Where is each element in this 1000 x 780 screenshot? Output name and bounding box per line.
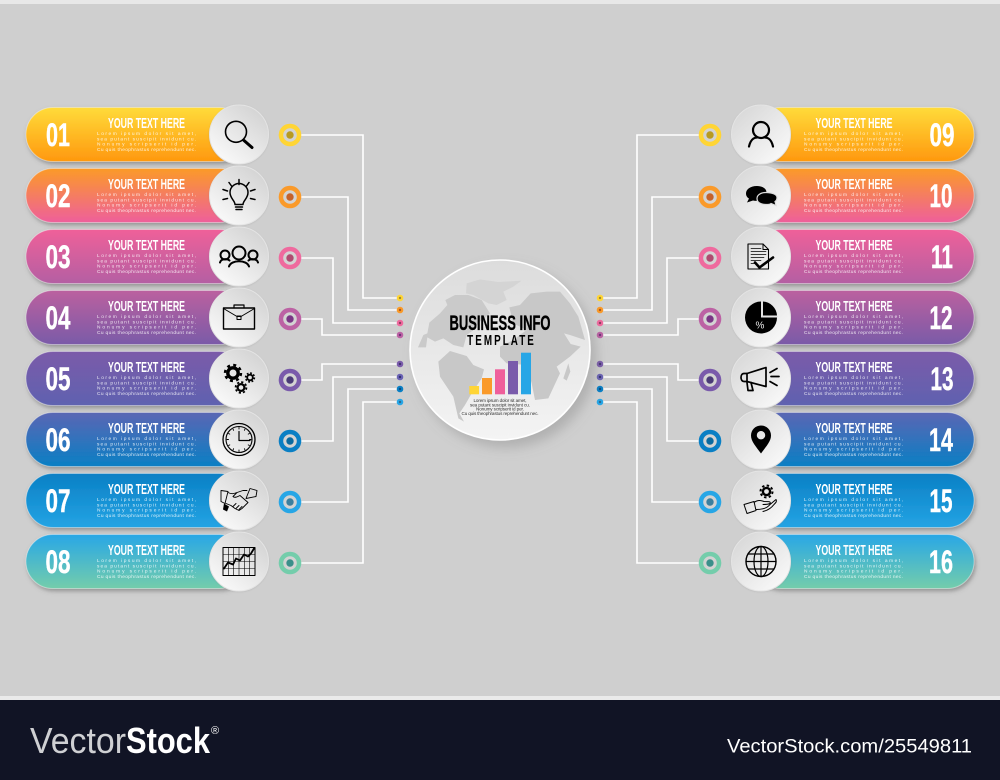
heading: YOUR TEXT HERE	[816, 481, 892, 498]
body text: Nonumy scripserit id per.	[97, 386, 196, 392]
bar	[754, 534, 974, 588]
number: 03	[46, 239, 70, 275]
icon: pie chart	[745, 300, 778, 334]
body text: Nonumy scripserit id per.	[97, 508, 196, 514]
body text	[804, 253, 903, 275]
panel: item 06	[26, 410, 301, 469]
body text: Lorem ipsum dolor sit amet,	[97, 192, 196, 198]
body text: Nonumy scripserit id per.	[804, 447, 903, 453]
ring	[699, 124, 721, 146]
heading: YOUR TEXT HERE	[108, 420, 185, 437]
body text: sea putant suscipit invidunt cu.	[804, 258, 903, 264]
number: 01	[46, 117, 70, 153]
body text: Cu quis theophrastus reprehendunt nec.	[97, 269, 196, 275]
heading: YOUR TEXT HERE	[108, 176, 185, 193]
body text	[804, 436, 903, 458]
icon circle	[210, 471, 268, 530]
icon circle	[732, 532, 790, 591]
heading: YOUR TEXT HERE	[108, 298, 185, 315]
body text: Cu quis theophrastus reprehendunt nec.	[804, 574, 903, 580]
number: 11	[931, 239, 953, 275]
panel: item 05	[26, 349, 301, 408]
ring	[699, 247, 721, 269]
panel: item 08	[26, 532, 301, 591]
panel: item 01	[26, 105, 301, 164]
number: 10	[930, 178, 952, 214]
body text: Lorem ipsum dolor sit amet,	[97, 314, 196, 320]
panel: item 14	[699, 410, 974, 469]
body text: Nonumy scripserit id per.	[804, 386, 903, 392]
icon: chart grid	[223, 548, 255, 576]
body text: Lorem ipsum dolor sit amet,	[804, 558, 903, 564]
ring	[279, 186, 301, 208]
number: 15	[930, 483, 952, 519]
body text	[97, 192, 196, 214]
body text: Nonumy scripserit id per.	[97, 203, 196, 209]
bar	[754, 352, 974, 406]
body text: Nonumy scripserit id per.	[804, 508, 903, 514]
bar	[26, 474, 246, 528]
brand logo	[30, 720, 219, 761]
body text: Cu quis theophrastus reprehendunt nec.	[804, 391, 903, 397]
body text	[804, 192, 903, 214]
heading: YOUR TEXT HERE	[108, 115, 185, 132]
panel: item 10	[699, 166, 974, 225]
icon: team	[220, 246, 258, 266]
ring	[699, 186, 721, 208]
ring	[279, 124, 301, 146]
body text	[97, 558, 196, 580]
small connector dots	[397, 295, 603, 405]
body text: Lorem ipsum dolor sit amet,	[97, 497, 196, 503]
heading: YOUR TEXT HERE	[816, 115, 892, 132]
body text	[804, 497, 903, 519]
body text: Lorem ipsum dolor sit amet,	[97, 558, 196, 564]
bar	[754, 474, 974, 528]
icon circle	[732, 288, 790, 347]
icon: map pin	[751, 426, 771, 454]
body text: sea putant suscipit invidunt cu.	[97, 136, 196, 142]
icon: document with check	[748, 244, 773, 269]
icon: clock	[223, 424, 255, 456]
heading: YOUR TEXT HERE	[816, 237, 892, 254]
heading: YOUR TEXT HERE	[816, 298, 892, 315]
footer edge	[0, 696, 1000, 700]
body text: sea putant suscipit invidunt cu.	[804, 136, 903, 142]
body text: sea putant suscipit invidunt cu.	[804, 380, 903, 386]
globe caption: sea putant suscipit invidunt cu.	[470, 402, 530, 407]
number: 08	[46, 544, 70, 580]
body text: sea putant suscipit invidunt cu.	[97, 319, 196, 325]
number: 14	[929, 422, 953, 458]
icon: person	[749, 122, 773, 146]
body text: Nonumy scripserit id per.	[804, 325, 903, 331]
icon circle	[732, 166, 790, 225]
body text: sea putant suscipit invidunt cu.	[804, 319, 903, 325]
body text: sea putant suscipit invidunt cu.	[804, 502, 903, 508]
icon: magnifier	[226, 121, 252, 148]
icon circle	[210, 349, 268, 408]
number: 07	[46, 483, 70, 519]
globe caption	[462, 398, 538, 416]
icon: megaphone	[741, 368, 779, 390]
body text	[97, 497, 196, 519]
footer band	[0, 696, 1000, 780]
body text: sea putant suscipit invidunt cu.	[804, 563, 903, 569]
brand logo: Stock	[126, 720, 211, 761]
subtitle: TEMPLATE	[467, 332, 534, 349]
body text: Nonumy scripserit id per.	[804, 203, 903, 209]
heading: YOUR TEXT HERE	[816, 420, 892, 437]
icon: light bulb	[223, 180, 255, 210]
title: BUSINESS INFO	[450, 312, 550, 335]
icon: pie chart: %	[756, 320, 765, 332]
body text: sea putant suscipit invidunt cu.	[804, 441, 903, 447]
ring	[279, 308, 301, 330]
footer background	[0, 700, 1000, 780]
icon: globe	[746, 546, 776, 576]
icon circle	[732, 105, 790, 164]
ring	[699, 369, 721, 391]
body text	[97, 436, 196, 458]
panel: item 09	[699, 105, 974, 164]
icon circle	[210, 227, 268, 286]
icon: gears	[225, 365, 254, 393]
number: 16	[929, 544, 953, 580]
body text: Cu quis theophrastus reprehendunt nec.	[97, 452, 196, 458]
brand logo: Vector	[30, 720, 126, 761]
body text: Cu quis theophrastus reprehendunt nec.	[97, 147, 196, 153]
body text: Nonumy scripserit id per.	[804, 264, 903, 270]
body text	[97, 253, 196, 275]
heading: YOUR TEXT HERE	[108, 237, 185, 254]
body text	[804, 375, 903, 397]
top strip	[0, 0, 1000, 4]
panel: central globe	[410, 260, 590, 440]
number: 06	[46, 422, 70, 458]
ring	[279, 430, 301, 452]
body text: Nonumy scripserit id per.	[804, 142, 903, 148]
number: 02	[46, 178, 70, 214]
body text	[804, 131, 903, 153]
body text: Nonumy scripserit id per.	[97, 569, 196, 575]
number: 04	[46, 300, 70, 336]
body text: sea putant suscipit invidunt cu.	[97, 380, 196, 386]
icon circle	[210, 105, 268, 164]
body text: Cu quis theophrastus reprehendunt nec.	[804, 269, 903, 275]
body text: Lorem ipsum dolor sit amet,	[804, 497, 903, 503]
body text: Lorem ipsum dolor sit amet,	[97, 375, 196, 381]
bar chart	[469, 353, 531, 394]
panel: item 02	[26, 166, 301, 225]
body text	[97, 314, 196, 336]
number: 09	[930, 117, 954, 153]
heading: YOUR TEXT HERE	[108, 481, 185, 498]
brand logo: ®	[211, 725, 219, 737]
panel: item 13	[699, 349, 974, 408]
body text: sea putant suscipit invidunt cu.	[97, 197, 196, 203]
icon circle	[732, 410, 790, 469]
body text: sea putant suscipit invidunt cu.	[97, 502, 196, 508]
body text: Lorem ipsum dolor sit amet,	[804, 131, 903, 137]
heading: YOUR TEXT HERE	[108, 542, 185, 559]
body text: Cu quis theophrastus reprehendunt nec.	[97, 208, 196, 214]
bar	[26, 108, 246, 162]
body text	[804, 558, 903, 580]
bar	[26, 168, 246, 222]
body text: Lorem ipsum dolor sit amet,	[804, 253, 903, 259]
icon circle	[210, 410, 268, 469]
globe disc	[410, 260, 590, 440]
body text: Nonumy scripserit id per.	[97, 142, 196, 148]
icon: handshake	[221, 488, 257, 512]
number: 05	[46, 361, 70, 397]
bar	[26, 534, 246, 588]
body text: Nonumy scripserit id per.	[97, 264, 196, 270]
panel: item 11	[699, 227, 974, 286]
bar	[754, 108, 974, 162]
body text: sea putant suscipit invidunt cu.	[97, 258, 196, 264]
body text: Cu quis theophrastus reprehendunt nec.	[97, 513, 196, 519]
icon circle	[210, 288, 268, 347]
icon circle	[210, 532, 268, 591]
bar	[754, 230, 974, 284]
body text: Lorem ipsum dolor sit amet,	[804, 375, 903, 381]
body text: Nonumy scripserit id per.	[97, 447, 196, 453]
icon circle	[732, 227, 790, 286]
bar	[754, 290, 974, 344]
bar	[26, 412, 246, 466]
ring	[699, 308, 721, 330]
panel: item 12	[699, 288, 974, 347]
heading: YOUR TEXT HERE	[816, 359, 892, 376]
icon circle	[732, 349, 790, 408]
bar	[26, 352, 246, 406]
panel: item 04	[26, 288, 301, 347]
globe caption: Lorem ipsum dolor sit amet,	[474, 398, 526, 403]
body text	[97, 375, 196, 397]
ring	[279, 369, 301, 391]
icon: chat bubbles	[746, 186, 777, 206]
body text: Lorem ipsum dolor sit amet,	[97, 131, 196, 137]
heading: YOUR TEXT HERE	[816, 542, 892, 559]
body text: sea putant suscipit invidunt cu.	[97, 563, 196, 569]
body text: Cu quis theophrastus reprehendunt nec.	[804, 147, 903, 153]
body text: Cu quis theophrastus reprehendunt nec.	[804, 452, 903, 458]
body text: Cu quis theophrastus reprehendunt nec.	[804, 208, 903, 214]
image id: VectorStock.com/25549811	[727, 736, 972, 758]
ring	[279, 247, 301, 269]
body text: Cu quis theophrastus reprehendunt nec.	[97, 330, 196, 336]
body text: sea putant suscipit invidunt cu.	[97, 441, 196, 447]
body text: Lorem ipsum dolor sit amet,	[97, 436, 196, 442]
body text: Lorem ipsum dolor sit amet,	[97, 253, 196, 259]
body text: Cu quis theophrastus reprehendunt nec.	[804, 513, 903, 519]
body text	[804, 314, 903, 336]
body text: Lorem ipsum dolor sit amet,	[804, 314, 903, 320]
body text: Lorem ipsum dolor sit amet,	[804, 436, 903, 442]
heading: YOUR TEXT HERE	[816, 176, 892, 193]
panel: item 03	[26, 227, 301, 286]
panel: item 07	[26, 471, 301, 530]
world map	[418, 279, 585, 422]
icon: hand with gear	[744, 486, 776, 514]
globe caption: Cu quis theophrastus reprehendunt nec.	[462, 411, 538, 416]
ring	[699, 491, 721, 513]
icon circle	[210, 166, 268, 225]
ring	[279, 552, 301, 574]
connector lines	[301, 135, 699, 563]
panel: item 16	[699, 532, 974, 591]
bar	[754, 168, 974, 222]
number: 13	[930, 361, 954, 397]
bar	[26, 230, 246, 284]
body text	[97, 131, 196, 153]
heading: YOUR TEXT HERE	[108, 359, 185, 376]
body text: Lorem ipsum dolor sit amet,	[804, 192, 903, 198]
number: 12	[930, 300, 952, 336]
body text: Cu quis theophrastus reprehendunt nec.	[97, 391, 196, 397]
icon circle	[732, 471, 790, 530]
panel: item 15	[699, 471, 974, 530]
icon: briefcase	[224, 305, 254, 329]
body text: Cu quis theophrastus reprehendunt nec.	[804, 330, 903, 336]
bar	[754, 412, 974, 466]
globe caption: Nonumy scripserit id per.	[476, 406, 524, 412]
bar	[26, 290, 246, 344]
body text: Cu quis theophrastus reprehendunt nec.	[97, 574, 196, 580]
body text: sea putant suscipit invidunt cu.	[804, 197, 903, 203]
ring	[279, 491, 301, 513]
ring	[699, 552, 721, 574]
body text: Nonumy scripserit id per.	[97, 325, 196, 331]
ring	[699, 430, 721, 452]
body text: Nonumy scripserit id per.	[804, 569, 903, 575]
